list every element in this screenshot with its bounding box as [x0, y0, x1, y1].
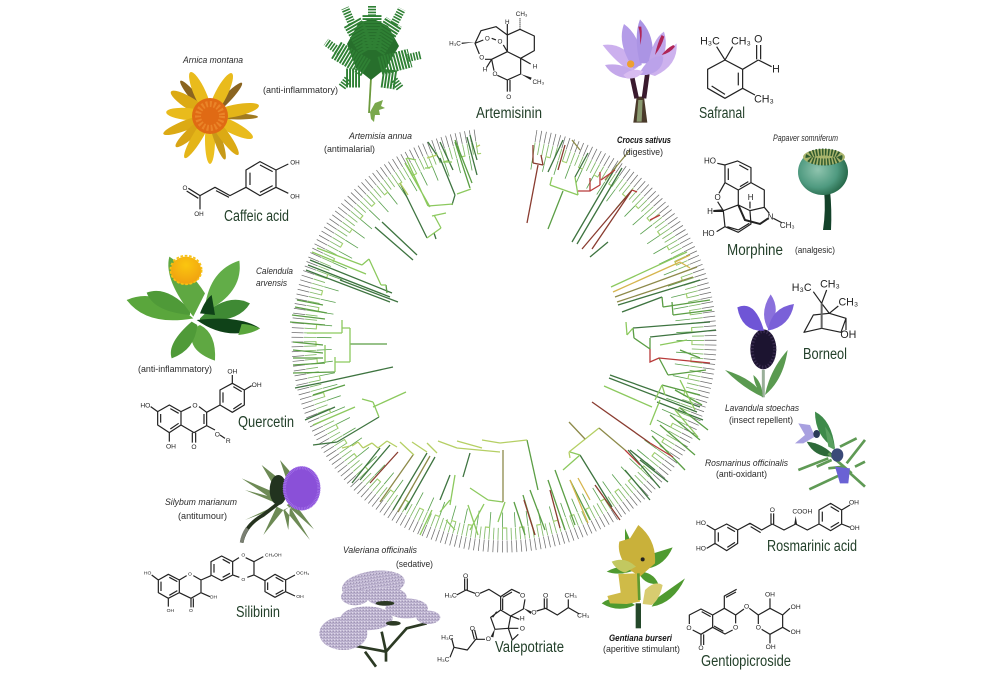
photo: milk thistle [242, 460, 320, 543]
molecule: gentiopicroside: OH [791, 629, 801, 636]
molecule: safranal: O [754, 34, 762, 46]
molecule: safranal: H₃C [700, 36, 720, 48]
panel: Papaver somniferum and morphine [703, 133, 848, 259]
molecule: silibinin: OCH₃ [296, 571, 309, 577]
compound name: Caffeic acid [224, 208, 289, 225]
mid green branches [290, 140, 712, 535]
molecule: gentiopicroside: O [733, 625, 738, 632]
photo: artemisia plant [326, 5, 421, 122]
molecule: valepotriate: O [463, 573, 468, 580]
species name: arvensis [256, 278, 287, 289]
molecule: artemisinin: CH₃ [532, 79, 545, 86]
molecule: silibinin: CH₂OH [265, 553, 282, 559]
molecule: rosmarinic acid: O [770, 507, 775, 514]
species name: Calendula [256, 266, 293, 277]
compound name: Artemisinin [476, 105, 542, 122]
use: sedative: (sedative) [396, 559, 433, 570]
molecule: silibinin: O [241, 552, 245, 558]
molecule: silibinin: O [241, 577, 245, 583]
molecule: caffeic acid: OH [290, 193, 300, 200]
molecule: rosmarinic acid: OH [849, 500, 859, 507]
molecule: valepotriate: O [475, 591, 480, 598]
molecule: caffeic acid: OH [194, 211, 204, 218]
molecule: caffeic acid: OH [290, 159, 300, 166]
molecule: silibinin: OH [296, 594, 304, 600]
molecule: gentiopicroside: O [686, 625, 692, 632]
molecule: artemisinin: O [485, 36, 490, 43]
molecule: rosmarinic acid: OH [850, 525, 860, 532]
molecule: quercetin [140, 368, 262, 451]
panel: Arnica montana and caffeic acid [162, 55, 338, 225]
panel: Rosmarinus officinalis and rosmarinic acid [696, 412, 865, 555]
terminal branches [310, 146, 698, 534]
molecule: silibinin: HO [144, 571, 152, 577]
species name: Arnica montana [182, 55, 243, 66]
molecule: rosmarinic acid: HO [696, 520, 706, 527]
molecule: morphine: HO [704, 157, 716, 166]
use: antimalarial: (antimalarial) [324, 144, 375, 155]
molecule: valepotriate: H₃C [437, 657, 450, 664]
compound name: Borneol [803, 346, 847, 363]
photo: lavender [725, 294, 794, 397]
panel: Lavandula stoechas and borneol [725, 278, 858, 426]
molecule: silibinin: OH [167, 608, 174, 614]
molecule: valepotriate: O [531, 609, 537, 616]
molecule: valepotriate: CH₃ [564, 592, 577, 599]
panel: Silybum marianum and silibinin [144, 460, 320, 621]
molecule: morphine: N [768, 212, 774, 221]
use: antitumour: (antitumour) [178, 511, 227, 522]
chart: circular phylogenetic tree [290, 112, 716, 546]
use: anti-inflammatory: (anti-inflammatory) [138, 364, 212, 375]
dark green branches [295, 135, 716, 510]
molecule: silibinin: OH [210, 595, 217, 601]
molecule: quercetin: O [192, 402, 198, 409]
molecule: gentiopicroside: O [756, 625, 761, 632]
molecule: artemisinin: CH₃ [516, 11, 528, 18]
molecule: artemisinin: O [506, 94, 511, 101]
molecule: borneol: CH₃ [838, 296, 858, 308]
molecule: morphine: O [715, 193, 721, 202]
molecule: quercetin: O [191, 444, 197, 451]
molecule: morphine: H [748, 193, 754, 202]
molecule: safranal: CH₃ [754, 93, 774, 105]
longer terminal branches [324, 160, 684, 520]
species name: Valeriana officinalis [343, 545, 417, 556]
species name: Rosmarinus officinalis [705, 458, 788, 469]
molecule: silibinin: O [189, 608, 193, 614]
molecule: valepotriate: H₃C [441, 634, 454, 641]
molecule: rosmarinic acid: COOH [792, 508, 812, 515]
molecule: quercetin: OH [227, 368, 238, 375]
molecule: gentiopicroside: OH [791, 604, 801, 611]
molecule: safranal [700, 34, 780, 105]
molecule: artemisinin: H₃C [449, 41, 461, 48]
molecule: valepotriate: O [486, 636, 491, 643]
species name: Artemisia annua [348, 131, 412, 142]
molecule: gentiopicroside: OH [766, 644, 776, 651]
molecule: borneol: OH [840, 329, 856, 341]
yellow-olive backbone branches [342, 145, 599, 458]
photo: gentian flower [602, 525, 685, 628]
species name: Silybum marianum [165, 497, 237, 508]
compound name: Valepotriate [495, 639, 564, 656]
species name: Gentiana burseri [609, 633, 672, 644]
use: insect repellent: (insect repellent) [729, 415, 793, 426]
compound name: Safranal [699, 105, 745, 122]
photo: poppy capsule [798, 149, 848, 230]
red branches [578, 170, 710, 465]
molecule: borneol: H₃C [792, 282, 812, 294]
dark red and brown branches [370, 145, 650, 535]
molecule: artemisinin: H [533, 64, 538, 71]
molecule: morphine: H [707, 207, 713, 216]
photo: arnica flower [162, 70, 260, 164]
panel: Calendula arvensis and quercetin [127, 256, 294, 451]
molecule: morphine: CH₃ [780, 221, 795, 230]
photo: crocus flower [603, 19, 677, 123]
use: analgesic: (analgesic) [795, 245, 835, 256]
panel: Valeriana officinalis and valepotriate [319, 545, 590, 667]
molecule: borneol [792, 278, 858, 341]
molecule: valepotriate: O [470, 626, 475, 633]
molecule: valepotriate: CH₃ [577, 612, 590, 619]
molecule: caffeic acid [183, 159, 300, 218]
species name: Lavandula stoechas [725, 403, 799, 414]
molecule: artemisinin [449, 11, 545, 101]
compound name: Gentiopicroside [701, 653, 791, 670]
use: anti-oxidant: (anti-oxidant) [716, 469, 767, 480]
sister connector arcs [316, 152, 692, 528]
molecule: quercetin: O [215, 431, 220, 438]
molecule: artemisinin: H [505, 19, 510, 26]
molecule: valepotriate: O [520, 626, 525, 633]
outer tip ticks [298, 134, 710, 546]
molecule: caffeic acid: O [183, 185, 188, 192]
light green branches [307, 158, 698, 535]
molecule: valepotriate: O [543, 592, 548, 599]
olive and tan branches [380, 140, 697, 512]
gold branches [570, 255, 690, 523]
molecule: gentiopicroside: O [744, 603, 749, 610]
gap at the top of the tree [476, 112, 539, 340]
compound name: Silibinin [236, 604, 280, 621]
molecule: artemisinin: O [493, 71, 498, 78]
molecule: gentiopicroside: OH [765, 591, 775, 598]
molecule: valepotriate: O [520, 592, 525, 599]
molecule: artemisinin: O [479, 55, 484, 62]
molecule: quercetin: R [226, 438, 231, 445]
molecule: silibinin: O [188, 571, 192, 577]
species name: Papaver somniferum [773, 133, 838, 144]
molecule: quercetin: HO [140, 403, 150, 410]
panel: Crocus sativus and safranal [603, 19, 780, 158]
molecule: silibinin [144, 552, 309, 614]
molecule: borneol: CH₃ [820, 278, 840, 290]
molecule: rosmarinic acid: HO [696, 546, 706, 553]
molecule: valepotriate: H [520, 616, 525, 623]
molecule: valepotriate [437, 573, 590, 664]
molecule: valepotriate: H₃C [444, 592, 457, 599]
compound name: Quercetin [238, 414, 294, 431]
molecule: morphine: HO [703, 229, 715, 238]
panel: Gentiana burseri and gentiopicroside [602, 525, 801, 670]
species name: Crocus sativus [617, 135, 671, 146]
molecule: artemisinin: O [498, 39, 503, 46]
molecule: safranal: CH₃ [731, 36, 751, 48]
molecule: rosmarinic acid [696, 500, 860, 553]
photo: calendula plant [127, 256, 260, 361]
molecule: gentiopicroside: O [698, 645, 704, 652]
molecule: quercetin: OH [252, 382, 262, 389]
molecule: artemisinin: H [483, 67, 488, 74]
use: anti-inflammatory: (anti-inflammatory) [263, 85, 338, 96]
molecule: gentiopicroside [686, 589, 801, 652]
use: digestive: (digestive) [623, 147, 663, 158]
molecule: safranal: H [772, 64, 780, 76]
photo: valerian flowers [319, 567, 440, 667]
use: aperitive stimulant: (aperitive stimulant) [603, 644, 680, 655]
panel: Artemisia annua and artemisinin [324, 5, 545, 155]
molecule: morphine [703, 157, 795, 238]
compound name: Rosmarinic acid [767, 538, 857, 555]
photo: rosemary sprig [795, 412, 865, 489]
compound name: Morphine [727, 242, 783, 259]
molecule: quercetin: OH [166, 443, 176, 450]
